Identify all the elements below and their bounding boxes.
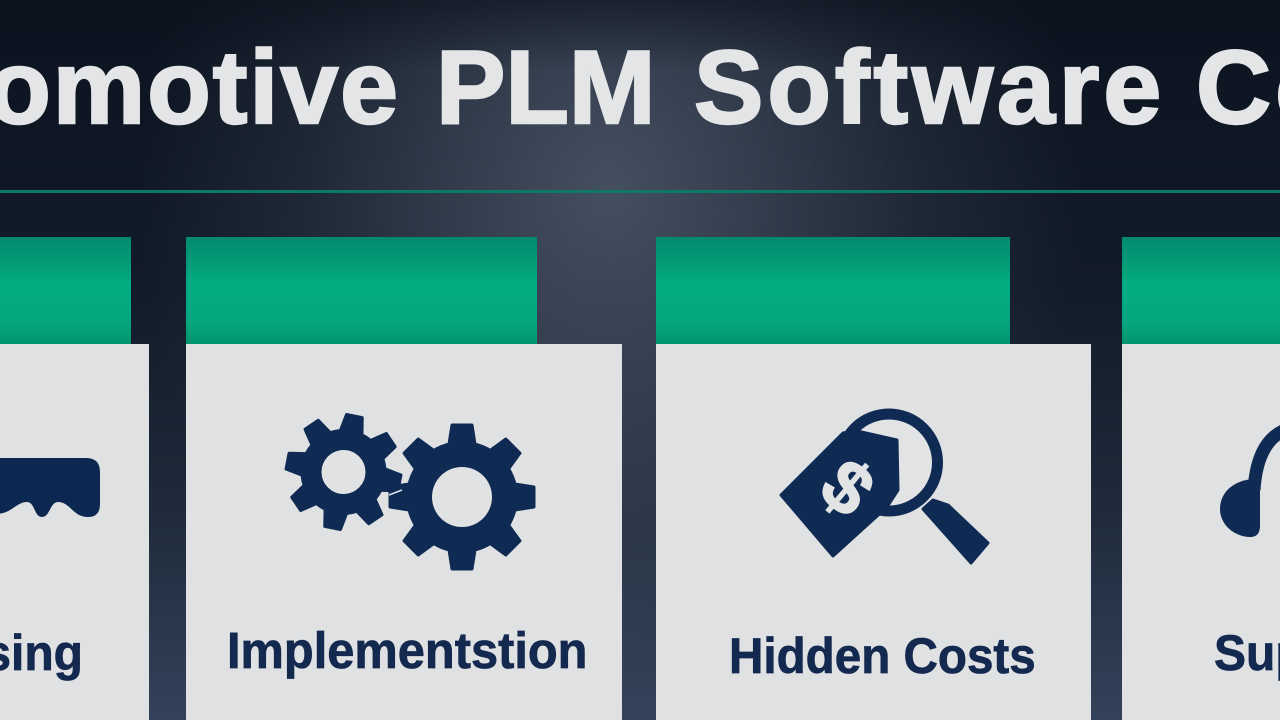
icon: gears bbox=[277, 405, 534, 569]
icon: key bbox=[0, 458, 100, 517]
panel body: licensing bbox=[0, 344, 149, 720]
icon: headset bbox=[1220, 430, 1280, 537]
icon: price tag under magnifying glass: $ bbox=[805, 442, 890, 532]
panel header: support bbox=[1122, 237, 1280, 344]
panel body: support bbox=[1122, 344, 1280, 720]
title divider line bbox=[0, 190, 1280, 193]
label: hidden costs: Hidden Costs bbox=[729, 629, 1036, 684]
panel body: hidden costs bbox=[656, 344, 1091, 720]
panel header: licensing bbox=[0, 237, 131, 344]
title: PLM bbox=[436, 30, 656, 146]
label: implementation: Implementstion bbox=[227, 622, 587, 679]
panel: licensing bbox=[0, 237, 149, 720]
title: Software bbox=[694, 30, 1165, 146]
panel: hidden costs bbox=[656, 237, 1091, 720]
panel header: implementation bbox=[186, 237, 537, 344]
icon: price tag under magnifying glass bbox=[781, 414, 988, 563]
panel: support bbox=[1122, 237, 1280, 720]
panel: implementation bbox=[186, 237, 622, 720]
panel header: hidden costs bbox=[656, 237, 1010, 344]
panel body: implementation bbox=[186, 344, 622, 720]
